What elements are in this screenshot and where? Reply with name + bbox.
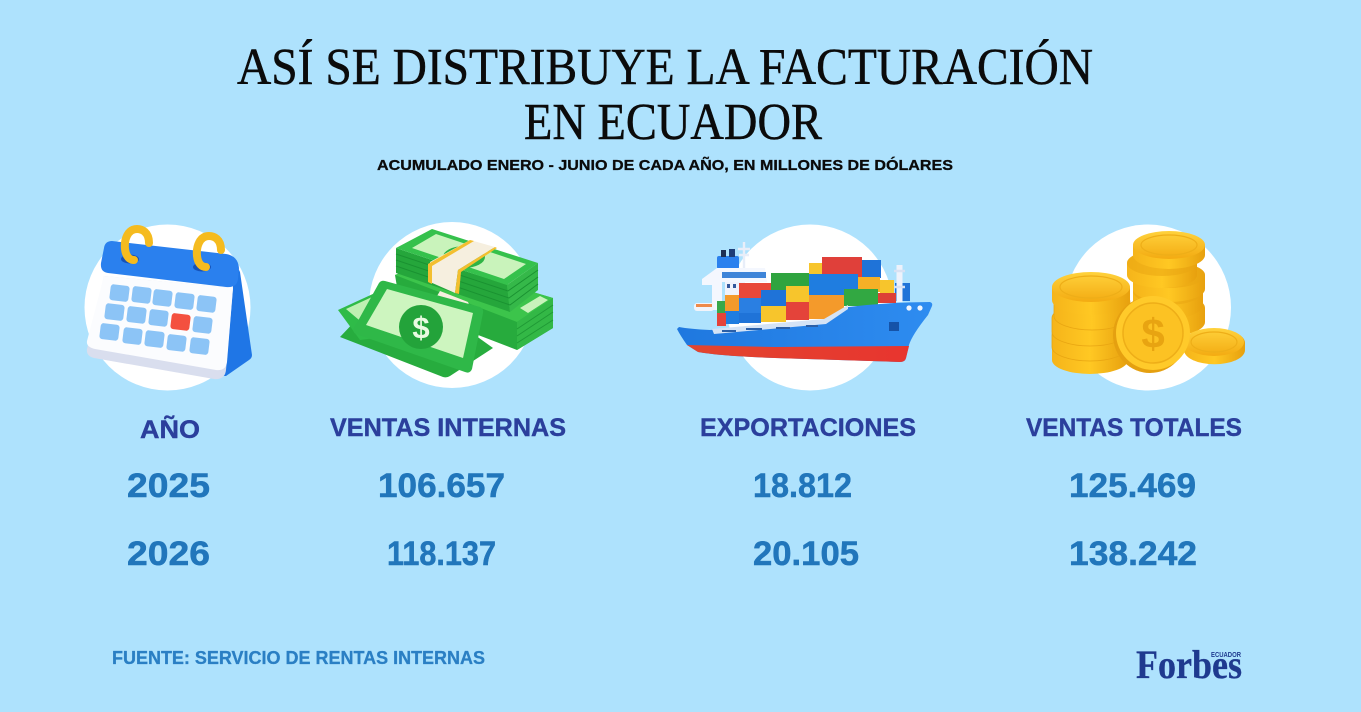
top stack <box>396 248 510 312</box>
subtitle: ACUMULADO ENERO - JUNIO DE CADA AÑO, EN MILLONES DE DÓLARES <box>377 156 953 174</box>
front bill <box>353 281 483 373</box>
icon: container ship <box>677 224 932 390</box>
row: 2025: 125.469 <box>1069 467 1196 505</box>
row: 2026 <box>127 535 1197 573</box>
icon: calendar <box>84 224 252 390</box>
icon: stacks of dollar bills: $ <box>412 310 430 345</box>
calendar rings <box>121 254 139 264</box>
paper band <box>430 240 495 293</box>
superstructure <box>694 242 767 311</box>
hull <box>677 302 932 362</box>
table headers: EXPORTACIONES <box>700 414 916 442</box>
logo: Forbes Ecuador: ECUADOR <box>1211 650 1241 659</box>
row: 2025 <box>127 467 1196 505</box>
row: 2025: 18.812 <box>753 467 852 505</box>
table headers: VENTAS INTERNAS <box>330 414 566 442</box>
icon: gold coins <box>1052 224 1245 390</box>
front mast <box>896 265 902 302</box>
source note: FUENTE: SERVICIO DE RENTAS INTERNAS <box>112 648 485 668</box>
calendar cells <box>99 284 217 355</box>
big front coin: $ <box>1141 310 1165 357</box>
row: 2025: 2025 <box>127 467 210 505</box>
right coin stack <box>1127 231 1205 336</box>
title <box>237 38 1093 151</box>
bottom loose bills <box>340 300 493 377</box>
icon: stacks of dollar bills <box>338 222 553 388</box>
big front coin <box>1113 296 1190 373</box>
title: ASÍ SE DISTRIBUYE LA FACTURACIÓN <box>237 38 1093 96</box>
row: 2026: 2026 <box>127 535 210 573</box>
row: 2026: 138.242 <box>1069 535 1197 573</box>
left coin stack <box>1052 272 1130 374</box>
row: 2026: 118.137 <box>387 535 496 573</box>
table headers: VENTAS TOTALES <box>1026 414 1242 442</box>
row: 2025: 106.657 <box>378 467 505 505</box>
title: EN ECUADOR <box>524 94 822 151</box>
logo: Forbes Ecuador: Forbes <box>1136 642 1242 687</box>
containers <box>717 257 910 326</box>
table headers: AÑO <box>140 414 200 444</box>
small right coin <box>1184 328 1245 364</box>
table headers <box>140 414 1242 444</box>
lower stack <box>395 262 553 350</box>
row: 2026: 20.105 <box>753 535 859 573</box>
